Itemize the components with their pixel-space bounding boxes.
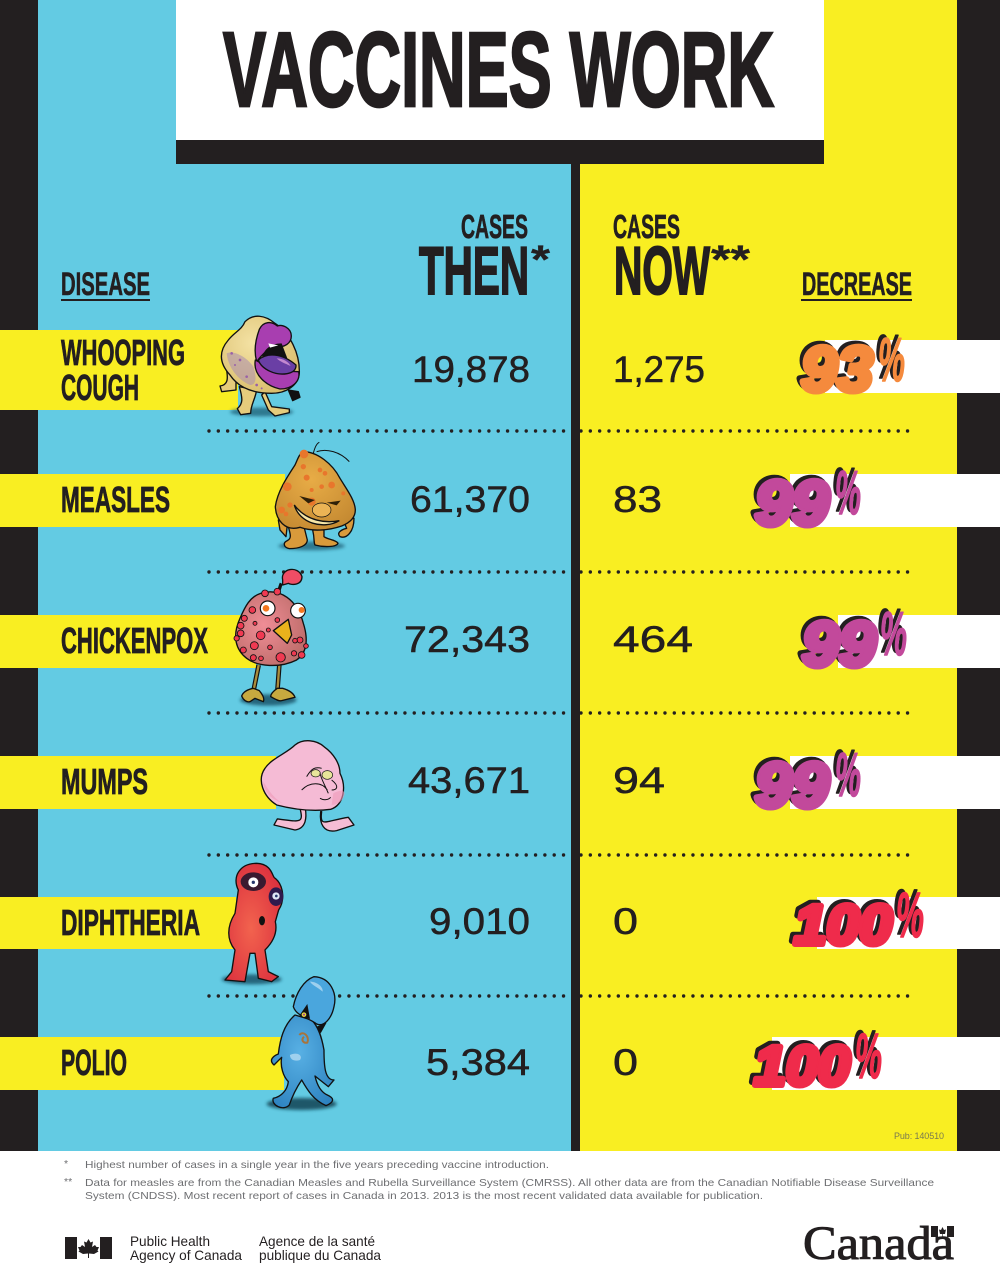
row: mumps: 94 [613,760,665,801]
footnotes [64,1158,934,1202]
yellow row bars [0,330,285,1090]
row: measles [61,479,662,520]
panel: cases then (blue) [38,0,571,1151]
decrease value: 100% diphtheria: 100 [794,893,892,956]
row: diphtheria [61,901,638,943]
footnotes: Data for measles are from the Canadian Measles and Rubella Surveillance System (CMRSS). All other data are from the Canadian Notifiable Disease Surveillance [85,1177,934,1189]
decrease value: 99% chickenpox: 99 [802,610,876,680]
column heading: decrease: DECREASE [802,266,912,302]
row: whooping cough: 1,275 [613,349,705,390]
icon: chickenpox germ [234,569,308,706]
agency name: publique du Canada [259,1247,381,1263]
row: diphtheria: DIPHTHERIA [61,902,200,943]
icon: diphtheria germ [222,863,283,984]
icon: measles germ [275,442,355,550]
row: chickenpox [61,619,693,661]
agency name: Agence de la santé [259,1233,375,1249]
row: whooping cough [61,332,705,408]
row: polio: 0 [613,1042,638,1083]
column heading: cases then: CASES [461,208,528,245]
row: polio [61,1042,638,1083]
decrease value: 99% measles: 99 [755,469,829,539]
footnotes: Highest number of cases in a single year in the five years preceding vaccine introduction. [85,1159,549,1171]
column heading: cases now: NOW [614,233,710,309]
text: % [855,1020,882,1092]
text: % [896,879,924,951]
row: chickenpox: 464 [613,619,693,660]
column heading: cases then: THEN [419,233,529,309]
row: mumps: MUMPS [61,761,148,802]
text: % [880,600,907,669]
column heading: decrease [801,266,912,302]
row: polio: 5,384 [426,1042,530,1083]
decrease value: 99% mumps: 99 [755,751,829,821]
decrease value: 100% diphtheria [794,879,924,956]
row: mumps: 43,671 [408,760,530,801]
row: chickenpox: 72,343 [404,619,530,660]
decrease value: 100% polio [754,1020,882,1097]
column heading: cases now [613,208,751,309]
text: % [878,326,905,395]
icon: canadian flag symbol [65,1237,112,1259]
icon: mumps germ [261,741,354,831]
decrease value: 99% mumps [755,741,861,821]
row: measles: 83 [613,479,662,520]
column heading: cases now: ** [711,238,751,282]
column heading: cases then: * [531,238,551,282]
column heading: disease: DISEASE [61,266,150,302]
icon: polio germ [267,977,337,1110]
row: diphtheria: 0 [613,901,638,942]
row: mumps [61,760,665,802]
row: measles: 61,370 [410,479,530,520]
publication number: Pub: 140510 [894,1131,944,1141]
panel: left black stripe [0,0,38,1151]
decrease value: 100% polio: 100 [754,1034,850,1097]
white decrease bars [772,340,1000,1090]
row: whooping cough: WHOOPING [61,332,185,373]
text: % [835,741,861,810]
column heading: cases now: CASES [613,208,680,245]
row: whooping cough: 19,878 [412,349,530,390]
row: chickenpox: CHICKENPOX [61,620,208,661]
column heading: cases then [419,208,551,309]
decrease value: 99% chickenpox [802,600,907,680]
decrease value: 93%: 93 [801,335,873,405]
panel: right black stripe [957,0,1000,1151]
panel: cases now (yellow) [580,0,957,1151]
row: measles: MEASLES [61,479,170,520]
title banner [176,0,824,164]
row: polio: POLIO [61,1042,127,1083]
footnotes: System (CNDSS). Most recent report of cases in Canada in 2013. 2013 is the most recent validated data available for publication. [85,1190,763,1202]
decrease value: 93% [801,326,905,405]
icon: whooping cough germ [220,316,300,416]
text: % [835,459,861,528]
column heading: disease [61,266,150,302]
row: whooping cough: COUGH [61,367,139,408]
center divider [571,150,580,1151]
agency name: Public Health [130,1233,210,1249]
decrease value: 99% measles [755,459,861,539]
agency name: Agency of Canada [130,1247,242,1263]
dotted row separators [209,431,911,996]
footnotes: ** [64,1176,72,1188]
footnotes: * [64,1158,68,1170]
agency name [130,1233,381,1263]
row: diphtheria: 9,010 [429,901,530,942]
